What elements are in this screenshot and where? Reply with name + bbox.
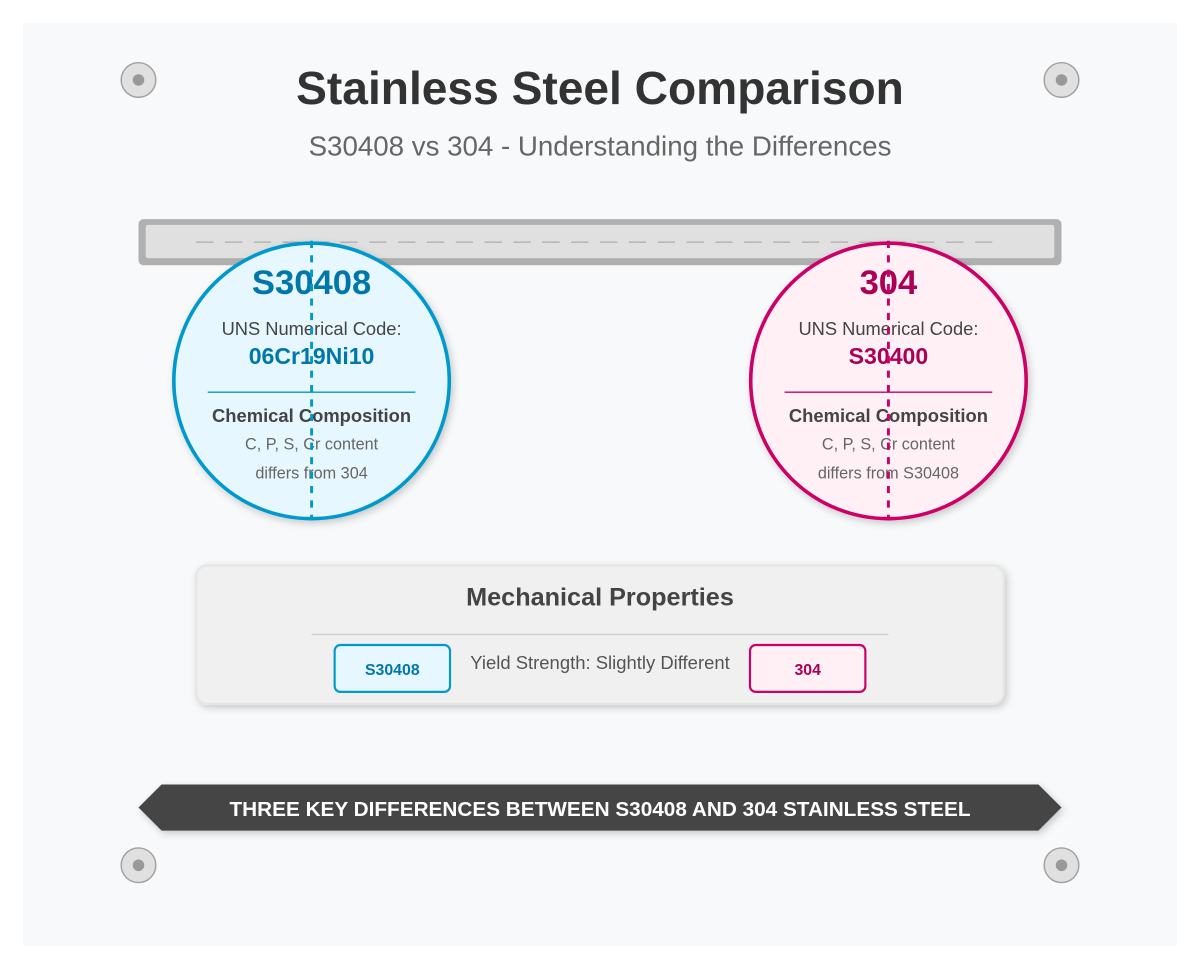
composition line 2: differs from 304 — [255, 464, 368, 482]
UNS label: UNS Numerical Code: — [222, 318, 402, 339]
UNS label: UNS Numerical Code: — [798, 318, 978, 339]
S30408 heading: S30408 — [252, 264, 371, 302]
UNS code value: 06Cr19Ni10 — [249, 343, 374, 369]
panel: mechanical properties — [196, 565, 1004, 704]
UNS code value: S30400 — [849, 343, 928, 369]
304 heading: 304 — [860, 264, 918, 302]
icon: top left bolt — [121, 63, 156, 97]
dashed center line — [311, 241, 313, 518]
composition heading: Chemical Composition — [212, 405, 411, 426]
304 badge — [750, 645, 865, 692]
divider — [208, 391, 415, 393]
S30408 badge: S30408 — [365, 662, 420, 679]
composition line 2: differs from S30408 — [818, 464, 959, 482]
304 badge: 304 — [794, 662, 821, 679]
banner: three key differences: THREE KEY DIFFERENCES BETWEEN S30408 AND 304 STAINLESS STEEL — [229, 798, 971, 821]
subtitle: S30408 vs 304 - Understanding the Differences — [309, 131, 891, 162]
composition line 1: C, P, S, Cr content — [245, 435, 379, 453]
panel: 304 circle — [751, 241, 1026, 519]
steel bar — [138, 219, 1062, 265]
yield strength text: Yield Strength: Slightly Different — [470, 652, 730, 673]
panel: S30408 circle — [174, 241, 449, 519]
dashed center line — [887, 241, 889, 518]
composition line 1: C, P, S, Cr content — [822, 435, 955, 453]
icon: bottom left bolt — [121, 848, 156, 883]
icon: top right bolt — [1044, 63, 1079, 97]
icon: bottom right bolt — [1044, 848, 1079, 883]
divider — [785, 391, 992, 393]
S30408 badge — [335, 645, 450, 692]
divider — [312, 633, 888, 635]
mechanical heading: Mechanical Properties — [466, 584, 734, 612]
title: Stainless Steel Comparison — [296, 62, 904, 114]
composition heading: Chemical Composition — [789, 405, 988, 426]
banner: three key differences — [138, 784, 1062, 831]
